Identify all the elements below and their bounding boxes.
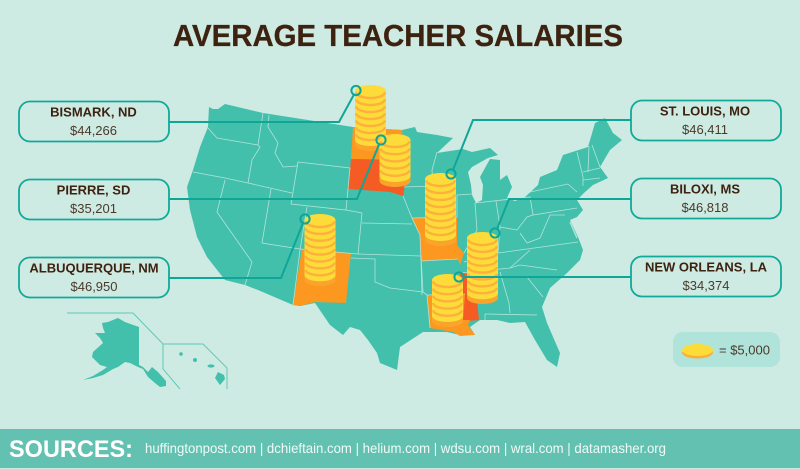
map: Alaska inset (67, 313, 180, 389)
coin stack: Bismark (355, 85, 386, 151)
highlighted state: Louisiana (427, 294, 475, 336)
highlighted state: North Dakota (351, 127, 405, 160)
coin stack: Pierre (380, 134, 410, 187)
callout: Albuquerque (19, 258, 169, 298)
leader line: Biloxi (490, 199, 631, 238)
highlighted state: Mississippi (460, 273, 497, 321)
callout: Biloxi (631, 178, 781, 218)
leader line: St. Louis (446, 120, 631, 179)
leader line: New Orleans (454, 272, 631, 282)
callout: New Orleans (631, 256, 781, 296)
highlighted state: New Mexico (293, 249, 351, 306)
highlighted state: South Dakota (348, 159, 405, 196)
footer: sources: SOURCES: (9, 436, 133, 463)
legend: = $5,000 (719, 342, 770, 358)
leader line: Bismark (169, 86, 361, 122)
leader line: Albuquerque (169, 214, 310, 278)
title: AVERAGE TEACHER SALARIES (173, 19, 623, 53)
callout: St. Louis: $46,411 (682, 122, 728, 137)
callout: Pierre (19, 180, 169, 220)
highlighted state: Missouri (412, 217, 464, 265)
footer: sources: huffingtonpost.com | dchieftain.com | helium.com | wdsu.com | wral.com | datamasher.org (145, 440, 666, 456)
coin stack: Albuquerque (304, 214, 336, 286)
footer: sources (0, 429, 800, 468)
callout: New Orleans: NEW ORLEANS, LA (645, 260, 768, 274)
leader line: Pierre (169, 135, 386, 199)
callout: New Orleans: $34,374 (682, 278, 730, 293)
callout: Albuquerque: ALBUQUERQUE, NM (29, 260, 159, 276)
callout: Pierre: PIERRE, SD (57, 182, 130, 198)
callout: Bismark: $44,266 (70, 123, 117, 138)
coin stack: New Orleans (432, 274, 463, 327)
coin stack: Biloxi (467, 232, 498, 304)
callout: Albuquerque: $46,950 (70, 279, 118, 294)
callout: Biloxi: BILOXI, MS (670, 182, 740, 196)
callout: Biloxi: $46,818 (682, 200, 728, 215)
legend (673, 332, 780, 367)
callout: St. Louis: ST. LOUIS, MO (660, 104, 750, 118)
callout: Bismark: BISMARK, ND (50, 104, 137, 120)
map: Hawaii inset (163, 344, 227, 389)
callout: Pierre: $35,201 (70, 201, 117, 216)
coin stack: St. Louis (425, 173, 456, 246)
map: contiguous United States (187, 104, 622, 370)
callout: Bismark (19, 102, 169, 142)
callout: St. Louis (631, 100, 781, 140)
